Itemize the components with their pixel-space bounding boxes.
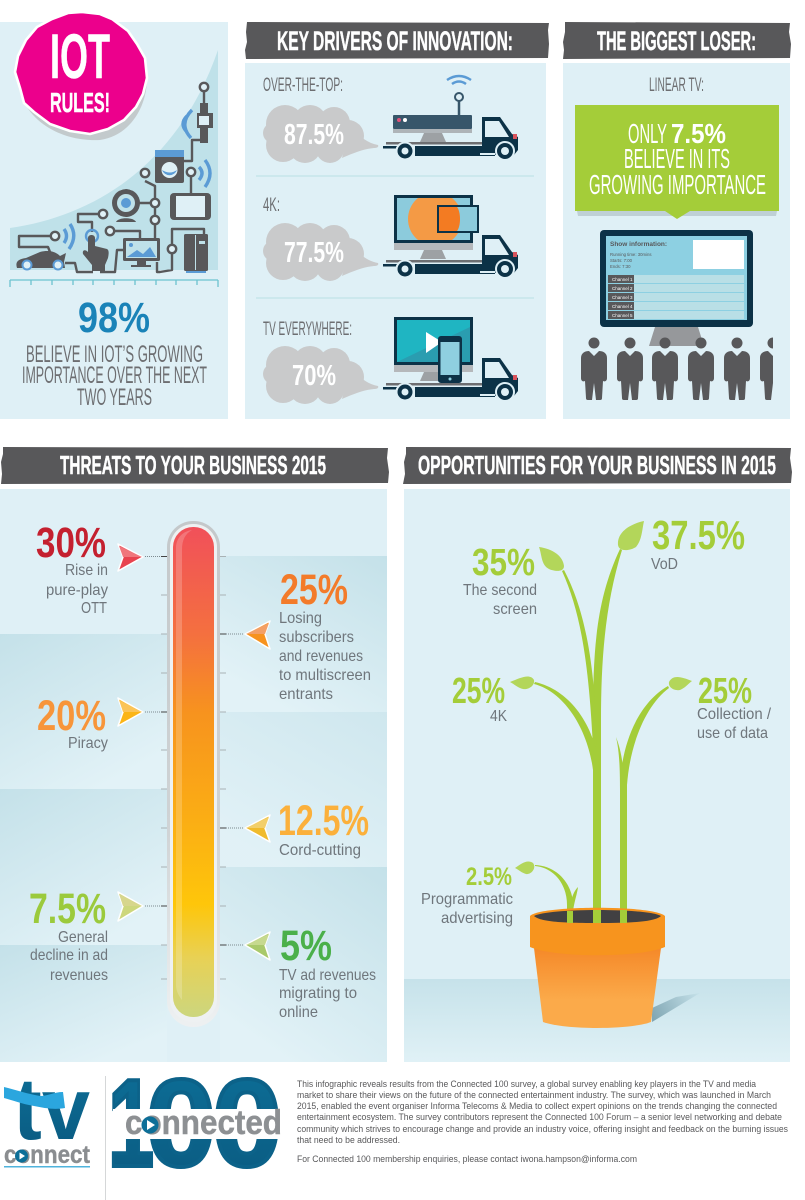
icon: set-top box bbox=[393, 76, 472, 142]
threat: 25% losing subscribers: to multiscreen bbox=[279, 667, 371, 684]
row: 4K: 77.5% bbox=[284, 237, 344, 269]
threat: 7.5% decline in ad revenues: revenues bbox=[50, 967, 108, 984]
threat: 7.5% decline in ad revenues: 7.5% bbox=[29, 885, 106, 933]
opportunity: 25% collection / use of data bbox=[697, 670, 772, 742]
threat: 12.5% cord-cutting: 12.5% bbox=[278, 797, 369, 845]
callout: ONLY bbox=[628, 118, 667, 149]
audience figures bbox=[581, 338, 786, 400]
icon: tablet bbox=[170, 193, 211, 220]
logo: Connected 100: 0 bbox=[146, 1055, 216, 1193]
icon: TV and smartphone bbox=[394, 317, 473, 383]
callout bbox=[575, 105, 779, 219]
threat: 20% piracy bbox=[37, 692, 167, 752]
badge: IoT rules: IOT bbox=[50, 22, 110, 92]
label: linear TV: LINEAR TV: bbox=[649, 74, 704, 96]
threat: 30% rise in pure-play OTT: OTT bbox=[81, 600, 107, 617]
threat: 5% TV ad revenues migrating: migrating to bbox=[279, 985, 357, 1002]
threat: 25% losing subscribers bbox=[220, 566, 371, 703]
flower pot bbox=[530, 908, 700, 1028]
threat: 5% TV ad revenues migrating: TV ad revenues bbox=[279, 967, 376, 984]
logo: Connected 100: 1 bbox=[108, 1055, 154, 1193]
opportunity: 2.5% programmatic advertising: 2.5% bbox=[466, 863, 512, 891]
thermometer bbox=[161, 521, 226, 1027]
heading bbox=[245, 22, 549, 59]
logo: TV Connect: connect bbox=[4, 1141, 91, 1169]
row: TV everywhere bbox=[263, 317, 518, 404]
icon: TV guide monitor bbox=[600, 230, 753, 346]
threat: 25% losing subscribers: entrants bbox=[279, 686, 333, 703]
threat: 7.5% decline in ad revenues bbox=[29, 885, 167, 984]
icon: TV guide monitor: Channel 3 bbox=[612, 295, 633, 300]
threat: 12.5% cord-cutting bbox=[220, 797, 369, 859]
row: over-the-top: OVER-THE-TOP: bbox=[263, 74, 343, 96]
threat: 7.5% decline in ad revenues: General bbox=[58, 929, 108, 946]
opportunity: 35% the second screen: 35% bbox=[472, 542, 535, 584]
opportunity: 25% collection / use of data: 25% bbox=[698, 670, 752, 711]
heading bbox=[1, 447, 389, 484]
opportunity: 25% collection / use of data: use of data bbox=[697, 725, 768, 742]
logo: Connected 100: 0 bbox=[212, 1055, 282, 1193]
panel: IoT rules bbox=[0, 12, 228, 419]
survey description bbox=[297, 1079, 788, 1165]
icon: TV guide monitor: Running time: 30mins bbox=[610, 252, 652, 257]
icon: car bbox=[16, 251, 66, 270]
row: TV everywhere: 70% bbox=[292, 360, 336, 392]
opportunity: 35% the second screen bbox=[463, 542, 537, 618]
badge: IoT rules bbox=[15, 12, 147, 140]
opportunity: 2.5% programmatic advertising: Programmatic bbox=[421, 891, 513, 908]
threat: 20% piracy: Piracy bbox=[68, 735, 108, 752]
threat: 25% losing subscribers: and revenues bbox=[279, 648, 363, 665]
text: believe in IoT: IMPORTANCE OVER THE NEXT bbox=[22, 362, 207, 389]
survey description: This infographic reveals results from the Connected 100 survey, a global survey enabling key players in the TV and media bbox=[297, 1079, 757, 1090]
threat: 30% rise in pure-play OTT bbox=[36, 519, 167, 617]
heading: KEY DRIVERS OF INNOVATION: bbox=[277, 26, 513, 56]
threat: 12.5% cord-cutting: Cord-cutting bbox=[279, 842, 361, 859]
opportunity: 37.5% VoD: VoD bbox=[651, 556, 678, 573]
opportunity: 25% 4K: 25% bbox=[452, 670, 505, 711]
panel: the biggest loser bbox=[563, 22, 791, 419]
leaves bbox=[510, 521, 692, 874]
badge: IoT rules: RULES! bbox=[50, 87, 110, 118]
stat: 98%: 98% bbox=[78, 294, 150, 342]
icon: TV guide monitor: Channel 5 bbox=[612, 313, 633, 318]
opportunity: 35% the second screen: screen bbox=[493, 601, 537, 618]
threat: 25% losing subscribers: 25% bbox=[280, 566, 348, 614]
threat: 5% TV ad revenues migrating bbox=[220, 922, 376, 1021]
opportunity: 25% collection / use of data: Collection / bbox=[697, 706, 772, 723]
opportunity: 35% the second screen: The second bbox=[463, 582, 537, 599]
icon: smartwatch bbox=[197, 103, 213, 143]
heading: THREATS TO YOUR BUSINESS 2015 bbox=[60, 450, 326, 480]
row: over-the-top bbox=[263, 74, 518, 163]
callout: 7.5% bbox=[671, 118, 726, 149]
heading bbox=[563, 22, 791, 59]
threat: 20% piracy: 20% bbox=[37, 692, 106, 740]
opportunity: 37.5% VoD bbox=[651, 512, 745, 573]
icon: 4K monitor with tablet bbox=[394, 192, 479, 259]
icon: TV guide monitor: Channel 1 bbox=[612, 277, 633, 282]
row: TV everywhere: TV EVERYWHERE: bbox=[263, 318, 352, 340]
opportunity: 25% 4K bbox=[452, 670, 507, 725]
opportunity: 2.5% programmatic advertising: advertising bbox=[441, 910, 513, 927]
threat: 30% rise in pure-play OTT: 30% bbox=[36, 519, 106, 567]
growth curve bbox=[10, 50, 218, 270]
text: believe in IoT: BELIEVE IN IOT’S GROWING bbox=[26, 341, 203, 368]
icon: webcam bbox=[112, 188, 140, 222]
icon: fridge bbox=[184, 234, 208, 273]
ruler bbox=[10, 280, 218, 287]
icon: monitor bbox=[123, 238, 160, 267]
panel: opportunities for your business bbox=[403, 447, 792, 1062]
threat: 25% losing subscribers: subscribers bbox=[279, 629, 354, 646]
icon: TV guide monitor: Channel 2 bbox=[612, 286, 633, 291]
logo: TV Connect: tv bbox=[13, 1059, 90, 1158]
row: over-the-top: 87.5% bbox=[284, 119, 344, 151]
survey description: For Connected 100 membership enquiries, please contact iwona.hampson@informa.com bbox=[297, 1154, 637, 1165]
opportunity: 25% 4K: 4K bbox=[490, 708, 507, 725]
threat: 7.5% decline in ad revenues: decline in ad bbox=[30, 947, 108, 964]
opportunity: 37.5% VoD: 37.5% bbox=[652, 512, 745, 558]
network of connected devices bbox=[16, 83, 213, 273]
threat: 5% TV ad revenues migrating: 5% bbox=[280, 922, 332, 970]
icon: TV guide monitor: Channel 4 bbox=[612, 304, 633, 309]
threat: 5% TV ad revenues migrating: online bbox=[279, 1004, 318, 1021]
icon: pointing hand bbox=[83, 230, 109, 271]
threat: 25% losing subscribers: Losing bbox=[279, 610, 322, 627]
icon: TV guide monitor: Ends: 7:30 bbox=[610, 264, 631, 269]
panel: key drivers of innovation bbox=[245, 22, 549, 419]
logo: Connected 100: connected bbox=[125, 1104, 282, 1142]
row: 4K: 4K: bbox=[263, 194, 280, 216]
survey description: that need to be addressed. bbox=[297, 1135, 400, 1146]
panel: threats to your business bbox=[0, 447, 389, 1062]
icon: washing machine bbox=[155, 150, 184, 183]
text: believe in IoT bbox=[22, 341, 207, 411]
opportunity: 2.5% programmatic advertising bbox=[421, 863, 513, 927]
logo: Connected 100 bbox=[108, 1055, 285, 1193]
plant bbox=[510, 521, 692, 923]
threat: 30% rise in pure-play OTT: Rise in bbox=[65, 562, 108, 579]
icon: TV guide monitor: Show information: bbox=[610, 241, 667, 248]
row: 4K bbox=[263, 192, 518, 281]
text: believe in IoT: TWO YEARS bbox=[77, 384, 152, 411]
icon: TV guide monitor: Starts: 7:00 bbox=[610, 258, 633, 263]
threat: 30% rise in pure-play OTT: pure-play bbox=[46, 582, 108, 599]
